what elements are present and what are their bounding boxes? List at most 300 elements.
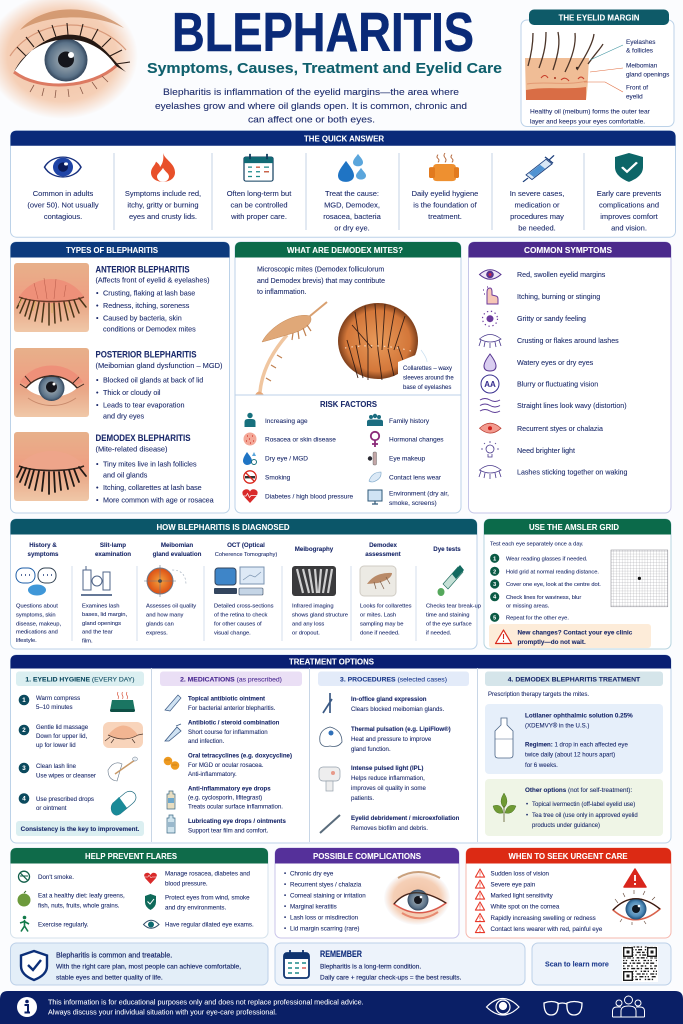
- callout: new changes: promptly—do not wait.: [518, 639, 586, 646]
- icon: cleansing wipe: [108, 757, 138, 781]
- step: drops or ointment: Use prescribed drops: [36, 796, 94, 803]
- column 4: demodex treatment: [485, 672, 663, 836]
- card: other options: •: [526, 802, 528, 808]
- steps: Wear reading glasses if needed.: [506, 556, 588, 562]
- item: gland expression: Clears blocked meibomian glands.: [351, 706, 444, 713]
- panel: how blepharitis is diagnosed: [10, 519, 481, 649]
- photo: eye close-up: [0, 0, 138, 119]
- quick answer: severe cases: [510, 155, 564, 233]
- disclaimer text: This information is for educational purposes only and does not replace professional medical advice.: [48, 998, 364, 1006]
- item: oral tetracyclines: Anti-inflammatory.: [188, 771, 237, 778]
- column: meibography: shows gland structure: [292, 612, 348, 618]
- text: demodex blepharitis: Tiny mites live in lash follicles: [103, 460, 197, 468]
- heading: diagnosed: HOW BLEPHARITIS IS DIAGNOSED: [156, 522, 290, 532]
- heading: amsler: USE THE AMSLER GRID: [529, 522, 619, 532]
- icon: red eye: [480, 270, 501, 279]
- step: warm compress: 5–10 minutes: [36, 704, 73, 711]
- column: dye tests: if needed.: [426, 630, 452, 636]
- subheading: demodex treatment: [485, 672, 663, 686]
- heading: types: [10, 242, 230, 258]
- item: thermal pulsation: [320, 726, 451, 753]
- callout: consistency: Consistency is the key to improvement.: [21, 826, 140, 833]
- icon: warm compress: [110, 692, 135, 712]
- heading: complications: [275, 848, 459, 864]
- subheading: demodex treatment: 4. DEMODEX BLEPHARITIS TREATMENT: [508, 676, 641, 683]
- icon: female symbol: [371, 432, 379, 447]
- complications list: Chronic dry eye: [290, 871, 334, 878]
- icon: glasses: [544, 1002, 582, 1015]
- panel: the eyelid margin: [521, 10, 674, 126]
- heading: prevent flares: [10, 848, 268, 864]
- QR code: [622, 946, 658, 982]
- icon: eye: [486, 998, 519, 1015]
- quick answer: treat the cause: MGD, Demodex,: [324, 200, 380, 210]
- symptom list: Recurrent styes or chalazia: [517, 425, 603, 433]
- text: mite description: to inflammation.: [257, 289, 306, 296]
- step: lid massage: up for lower lid: [36, 742, 76, 749]
- step: warm compress: 1: [22, 697, 26, 704]
- complications list: Corneal staining or irritation: [290, 893, 366, 900]
- tip: manage conditions: Manage rosacea, diabetes and: [165, 871, 251, 878]
- column: OCT: for other causes of: [214, 622, 262, 628]
- text: demodex blepharitis: More common with age or rosacea: [103, 496, 214, 504]
- heading: prevent flares: HELP PREVENT FLARES: [85, 851, 177, 861]
- item: IPL: Helps reduce inflammation,: [351, 775, 425, 782]
- column: history and symptoms: [16, 542, 61, 644]
- icon: heart: [242, 489, 258, 503]
- column 2: medications: [160, 672, 302, 834]
- tip: don't smoke: [18, 871, 74, 882]
- icon: computer screen: [368, 490, 382, 504]
- labels: eyelid anatomy: gland openings: [626, 72, 669, 78]
- icon: eye makeup: [368, 452, 376, 465]
- item: anti-inflammatory drops: Treats ocular surface inflammation.: [188, 804, 283, 811]
- callout: common and treatable: stable eyes and better quality of life.: [56, 974, 163, 981]
- text: posterior blepharitis: and dry eyes: [103, 412, 145, 420]
- photo: anterior blepharitis: [14, 263, 89, 332]
- step: drops or ointment: or ointment: [36, 805, 67, 812]
- icon: OCT machine: [214, 567, 264, 595]
- heading: diagnosed: [10, 519, 477, 534]
- item: IPL: patients.: [351, 795, 374, 802]
- column: slit-lamp: [81, 542, 131, 644]
- item: oral tetracyclines: Oral tetracyclines (e.g. doxycycline): [188, 752, 292, 760]
- icon: shield check: [21, 951, 47, 980]
- quick answer: daily hygiene: is the foundation of: [413, 200, 478, 210]
- heading: eyelid margin: THE EYELID MARGIN: [558, 12, 640, 22]
- steps: 4: [493, 595, 497, 601]
- panel: possible complications: [275, 848, 459, 938]
- text: posterior blepharitis: •: [96, 388, 99, 397]
- step: lid massage: 2: [22, 727, 26, 734]
- icon: people: [612, 996, 644, 1017]
- callout: remember: REMEMBER: [320, 949, 362, 959]
- column: meibomian gland evaluation: and how many: [146, 612, 184, 618]
- text: posterior blepharitis: •: [96, 376, 99, 384]
- icon: bottle: [495, 718, 513, 758]
- text: collarettes note: [403, 350, 454, 391]
- labels: eyelid anatomy: [584, 39, 669, 100]
- item: debridement: Eyelid debridement / microexfoliation: [351, 815, 460, 822]
- panel: types of blepharitis: [10, 242, 230, 513]
- icon: slit lamp: [81, 566, 112, 595]
- text: posterior blepharitis: Thick or cloudy oil: [103, 388, 161, 397]
- column: meibography: and any loss: [292, 622, 324, 628]
- illustration: magnified eyelid with collarettes: [338, 303, 423, 396]
- icon: gritty: [482, 311, 498, 326]
- text: demodex blepharitis: [96, 432, 214, 504]
- item: lubricating drops: Lubricating eye drops / ointments: [188, 818, 286, 825]
- icon: family: [367, 414, 383, 426]
- complications list: •: [284, 893, 286, 900]
- risk factors right column: Eye makeup: [389, 455, 426, 462]
- item: topical ointment: Topical antibiotic ointment: [188, 696, 265, 702]
- icon: tea tree leaf: [493, 793, 516, 822]
- icon: warning triangle: [496, 630, 512, 644]
- column: OCT: OCT (Optical: [227, 542, 265, 549]
- tip: exercise: Exercise regularly.: [38, 921, 89, 928]
- quick answer: long-term: Often long-term but: [227, 189, 292, 198]
- tip: exercise: [20, 916, 89, 932]
- subheading: medications: 2. MEDICATIONS (as prescribed): [180, 676, 282, 683]
- labels: eyelid anatomy: Meibomian: [626, 62, 658, 70]
- icon: rosacea: [244, 432, 256, 446]
- column: dye tests: time and staining: [426, 612, 469, 618]
- icon: capsule: [111, 791, 136, 815]
- complications list: •: [284, 871, 286, 878]
- steps: Repeat for the other eye.: [506, 615, 569, 621]
- steps: 1: [493, 556, 496, 562]
- text: anterior blepharitis: [96, 264, 210, 334]
- quick answer: treat the cause: rosacea, bacteria: [323, 212, 382, 221]
- icon: mite microscope view: [360, 566, 396, 596]
- column: slit-lamp: Examines lash: [82, 604, 119, 610]
- column: history and symptoms: disease, makeup,: [16, 622, 61, 628]
- column 3: procedures: [318, 672, 469, 833]
- item: IPL: Intense pulsed light (IPL): [351, 765, 423, 772]
- quick answer: treat the cause: Treat the cause:: [325, 189, 379, 198]
- step: drops or ointment: [19, 791, 136, 815]
- callout: consistency: [16, 821, 144, 836]
- panel: what are demodex mites: [235, 242, 461, 513]
- item: anti-inflammatory drops: [167, 785, 283, 811]
- column: demodex assessment: [360, 542, 412, 636]
- item: topical ointment: [165, 695, 276, 712]
- icon: dropper: [438, 565, 464, 596]
- symptom list: Need brighter light: [517, 447, 575, 455]
- column: demodex assessment: assessment: [365, 551, 401, 558]
- tip: don't smoke: Don't smoke.: [38, 874, 74, 881]
- item: topical ointment: For bacterial anterior blepharitis.: [188, 705, 276, 712]
- card: lotilaner: (XDEMVY® in the U.S.): [525, 722, 589, 730]
- item: antibiotic steroid: Short course for inflammation: [188, 729, 268, 736]
- text: anterior blepharitis: ANTERIOR BLEPHARITIS: [96, 264, 190, 274]
- item: anti-inflammatory drops: (e.g. cyclosporin, lifitegrast): [188, 795, 262, 802]
- text: demodex blepharitis: DEMODEX BLEPHARITIS: [96, 432, 190, 443]
- text: mite description: Microscopic mites (Demodex folliculorum: [257, 266, 384, 274]
- tip: healthy diet: Eat a healthy diet: leafy greens,: [38, 892, 125, 899]
- column: slit-lamp: bases, lid margin,: [82, 612, 127, 618]
- labels: eyelid anatomy: eyelid: [626, 94, 643, 100]
- urgent list: White spot on the cornea: [490, 904, 560, 911]
- column 1: eyelid hygiene: [16, 672, 144, 836]
- text: mite description: [257, 266, 385, 296]
- quick answer: common in adults: [27, 157, 99, 221]
- column: history and symptoms: History &: [29, 542, 57, 549]
- quick answer: treat the cause: or dry eye.: [334, 224, 370, 233]
- labels: eyelid anatomy: & follicles: [626, 48, 653, 54]
- subheading: medications: [160, 672, 302, 686]
- icon: dry eye drops: [243, 452, 256, 465]
- column: slit-lamp: gland openings: [82, 621, 121, 627]
- risk factors left column: Smoking: [265, 474, 291, 481]
- text: demodex blepharitis: •: [96, 483, 99, 492]
- urgent list: Severe eye pain: [490, 882, 536, 889]
- icon: smoking: [244, 471, 256, 483]
- quick answer: daily hygiene: treatment.: [428, 212, 462, 221]
- steps: Check lines for waviness, blur: [506, 595, 581, 601]
- risk factors right column: Environment (dry air,: [389, 490, 449, 498]
- item: thermal pulsation: Heat and pressure to improve: [351, 736, 432, 743]
- item: anti-inflammatory drops: Anti-inflammatory eye drops: [188, 785, 271, 792]
- column: meibography: [292, 546, 348, 636]
- text: anterior blepharitis: Crusting, flaking at lash base: [103, 288, 195, 298]
- column: meibography: Meibography: [295, 546, 334, 553]
- text: anterior blepharitis: •: [96, 314, 99, 322]
- heading: urgent care: WHEN TO SEEK URGENT CARE: [508, 851, 628, 861]
- callout: new changes: New changes? Contact your eye clinic: [518, 630, 633, 636]
- complications list: •: [284, 882, 286, 889]
- callout: scan to learn more: [532, 943, 671, 985]
- quick answer: daily hygiene: Daily eyelid hygiene: [412, 189, 478, 198]
- text: mite description: and Demodex brevis) that may contribute: [257, 278, 385, 285]
- step: clean lash line: 3: [22, 765, 26, 772]
- disclaimer text: [48, 998, 364, 1016]
- labels: eyelid anatomy: Eyelashes: [626, 39, 656, 46]
- column: meibomian gland evaluation: express.: [146, 630, 168, 636]
- text: anterior blepharitis: •: [96, 301, 99, 310]
- heading: quick answer: THE QUICK ANSWER: [304, 133, 385, 143]
- chart: amsler grid: [611, 550, 668, 607]
- text: collarettes note: base of eyelashes: [403, 385, 451, 391]
- heading: demodex mites: WHAT ARE DEMODEX MITES?: [287, 245, 403, 255]
- quick answer: long-term: can be controlled: [230, 200, 288, 210]
- symptom list: [479, 270, 627, 479]
- text: collarettes note: Collarettes – waxy: [403, 366, 452, 372]
- quick answer: severe cases: procedures may: [510, 212, 564, 221]
- quick answer: early care: Early care prevents: [597, 189, 662, 198]
- panel: when to seek urgent care: [466, 848, 671, 938]
- complications list: •: [284, 904, 286, 911]
- card: other options: •: [526, 813, 528, 819]
- quick answer: severe cases: be needed.: [518, 224, 556, 233]
- item: lubricating drops: Support tear film and comfort.: [188, 827, 269, 834]
- panel: use the amsler grid: [484, 519, 671, 649]
- heading: treatment: TREATMENT OPTIONS: [289, 656, 374, 666]
- quick answer: symptoms: eyes and crusty lids.: [129, 212, 197, 221]
- text: posterior blepharitis: •: [96, 400, 99, 410]
- icon: big warning triangle: [624, 869, 646, 887]
- heading: urgent care: [466, 848, 671, 864]
- heading: quick answer: [10, 131, 676, 146]
- quick answer: symptoms: [125, 153, 201, 221]
- text: anterior blepharitis: Redness, itching, soreness: [103, 301, 190, 310]
- quick answer: severe cases: In severe cases,: [510, 189, 564, 198]
- callout: common and treatable: Blepharitis is common and treatable.: [56, 950, 172, 959]
- text: anterior blepharitis: conditions or Demodex mites: [103, 324, 196, 334]
- subheading: eyelid hygiene: [16, 672, 144, 686]
- quick answer: early care: [597, 153, 662, 233]
- quick answer: symptoms: Symptoms include red,: [125, 189, 201, 198]
- steps: [490, 554, 601, 622]
- complications list: •: [284, 915, 286, 922]
- subheading: procedures: 3. PROCEDURES (selected cases): [340, 676, 447, 683]
- column: dye tests: [426, 546, 481, 636]
- icon: blurry vision: [481, 375, 499, 393]
- risk factors right column: smoke, screens): [389, 500, 437, 507]
- text: anterior blepharitis: •: [96, 288, 99, 298]
- heading: demodex mites: [235, 242, 461, 258]
- subheading: procedures: [318, 672, 469, 686]
- heading: common symptoms: [468, 242, 671, 258]
- complications list: [284, 871, 366, 933]
- column: meibography: or dropout.: [292, 630, 320, 636]
- quick answer: early care: complications and: [599, 200, 659, 210]
- icon: blurry vision: AA: [484, 380, 496, 389]
- step: lid massage: [19, 722, 143, 749]
- step: warm compress: [19, 692, 135, 712]
- item: thermal pulsation: gland function.: [351, 746, 391, 753]
- intro text: [155, 87, 467, 126]
- column: meibomian gland evaluation: [144, 542, 202, 636]
- quick answer: common in adults: contagious.: [44, 212, 82, 221]
- risk factors right column: Hormonal changes: [389, 436, 444, 444]
- icon: target retina: [144, 565, 186, 597]
- urgent list: Contact lens wearer with red, painful eye: [490, 926, 603, 933]
- symptom list: Watery eyes or dry eyes: [517, 359, 594, 367]
- text: anterior blepharitis: Caused by bacteria, skin: [103, 314, 182, 322]
- text: posterior blepharitis: Blocked oil glands at back of lid: [103, 376, 203, 384]
- heading: amsler: [484, 519, 671, 534]
- quick answer: symptoms: itchy, gritty or burning: [127, 200, 199, 210]
- text: demodex blepharitis: •: [96, 460, 99, 468]
- intro text: Blepharitis is inflammation of the eyelid margins—the area where: [163, 87, 459, 98]
- photo: inflamed eye: [384, 871, 450, 925]
- column: demodex assessment: Looks for collarettes: [360, 604, 412, 610]
- icon: contact lens: [369, 472, 381, 482]
- icon: infrared image: [292, 566, 336, 596]
- item: oral tetracyclines: For MGD or ocular rosacea.: [188, 762, 264, 769]
- quick answer: early care: improves comfort: [600, 212, 659, 221]
- column: demodex assessment: or mites. Lash: [360, 612, 396, 618]
- column: OCT: [214, 542, 277, 636]
- icon: speech bubbles: [16, 568, 56, 596]
- callout: new changes: [489, 624, 651, 648]
- text: prescription therapy: Prescription therapy targets the mites.: [488, 692, 589, 698]
- subtitle: Symptoms, Causes, Treatment and Eyelid Care: [147, 60, 502, 77]
- icon: itching finger: [483, 287, 498, 304]
- column: demodex assessment: Demodex: [369, 542, 397, 549]
- heading: common symptoms: COMMON SYMPTOMS: [524, 245, 612, 255]
- tip: manage conditions: blood pressure.: [165, 881, 208, 888]
- risk factors right column: Family history: [389, 418, 430, 425]
- card: other options: [485, 779, 663, 836]
- steps: 3: [493, 582, 496, 588]
- steps: or missing areas.: [506, 603, 550, 609]
- urgent list: [475, 869, 603, 933]
- column: history and symptoms: lifestyle.: [16, 638, 37, 644]
- heading: treatment: [10, 655, 671, 668]
- card: lotilaner: Regimen: 1 drop in each affected eye: [525, 741, 628, 748]
- risk factors left column: Diabetes / high blood pressure: [265, 494, 354, 500]
- urgent list: Marked light sensitivity: [490, 893, 554, 900]
- panel: help prevent flares: [10, 848, 268, 938]
- item: antibiotic steroid: Antibiotic / steroid combination: [188, 720, 280, 726]
- step: clean lash line: Use wipes or cleanser: [36, 772, 96, 779]
- column: meibomian gland evaluation: Assesses oil quality: [146, 604, 196, 610]
- callout: remember: Daily care + regular check-ups = the best results.: [320, 974, 461, 981]
- quick answer: treat the cause: [323, 154, 382, 233]
- quick answer: early care: and vision.: [611, 224, 647, 233]
- steps: 5: [493, 615, 496, 621]
- diagram: eyelid cross section: [525, 32, 603, 100]
- column: slit-lamp: and the tear: [82, 630, 113, 636]
- symptom list: Blurry or fluctuating vision: [517, 380, 598, 388]
- tip: healthy diet: fish, nuts, fruits, whole grains.: [38, 902, 120, 909]
- column: demodex assessment: done if needed.: [360, 630, 400, 636]
- symptom list: Straight lines look wavy (distortion): [517, 402, 627, 410]
- column: dye tests: Checks tear break-up: [426, 604, 481, 610]
- item: antibiotic steroid: [165, 720, 280, 745]
- column: history and symptoms: symptoms, skin: [16, 612, 56, 618]
- urgent list: Sudden loss of vision: [490, 871, 550, 878]
- panel: the quick answer: [10, 131, 676, 237]
- caption: healthy oil: [530, 108, 651, 125]
- quick answer: common in adults: Common in adults: [33, 189, 93, 198]
- risk factors left column: [242, 413, 354, 503]
- text: demodex blepharitis: •: [96, 496, 99, 504]
- labels: eyelid anatomy: Front of: [626, 84, 648, 92]
- column: slit-lamp: Slit-lamp: [100, 542, 126, 549]
- column: meibomian gland evaluation: gland evaluation: [153, 551, 202, 558]
- step: warm compress: Warm compress: [36, 695, 80, 702]
- icon: massage eye: [103, 722, 143, 748]
- column: OCT: Coherence Tomography): [215, 552, 277, 558]
- column: history and symptoms: medications and: [16, 630, 58, 636]
- callout: remember: Blepharitis is a long-term condition.: [320, 963, 421, 970]
- column: history and symptoms: symptoms: [28, 551, 59, 558]
- step: lid massage: Gentle lid massage: [36, 724, 89, 731]
- tip: protect eyes: Protect eyes from wind, smoke: [165, 895, 250, 902]
- symptom list: Lashes sticking together on waking: [517, 468, 627, 476]
- text: posterior blepharitis: [96, 348, 222, 420]
- item: thermal pulsation: Thermal pulsation (e.g. LipiFlow®): [351, 726, 451, 733]
- risk factors left column: Dry eye / MGD: [265, 455, 308, 462]
- column: dye tests: of the eye surface: [426, 622, 472, 628]
- item: gland expression: In-office gland expression: [351, 696, 427, 703]
- item: IPL: [319, 765, 426, 802]
- text: demodex blepharitis: and oil glands: [103, 470, 148, 480]
- risk factors right column: Contact lens wear: [389, 474, 442, 481]
- risk factors left column: Rosacea or skin disease: [265, 436, 336, 444]
- caption: healthy oil: Healthy oil (meibum) forms the outer tear: [530, 108, 651, 115]
- item: debridement: Removes biofilm and debris.: [351, 825, 428, 832]
- icon: wavy lines: [480, 398, 500, 412]
- quick answer: long-term: with proper care.: [230, 212, 287, 221]
- quick answer: daily hygiene: [412, 153, 478, 221]
- urgent list: Rapidly increasing swelling or redness: [490, 915, 596, 922]
- symptom list: Red, swollen eyelid margins: [517, 271, 606, 279]
